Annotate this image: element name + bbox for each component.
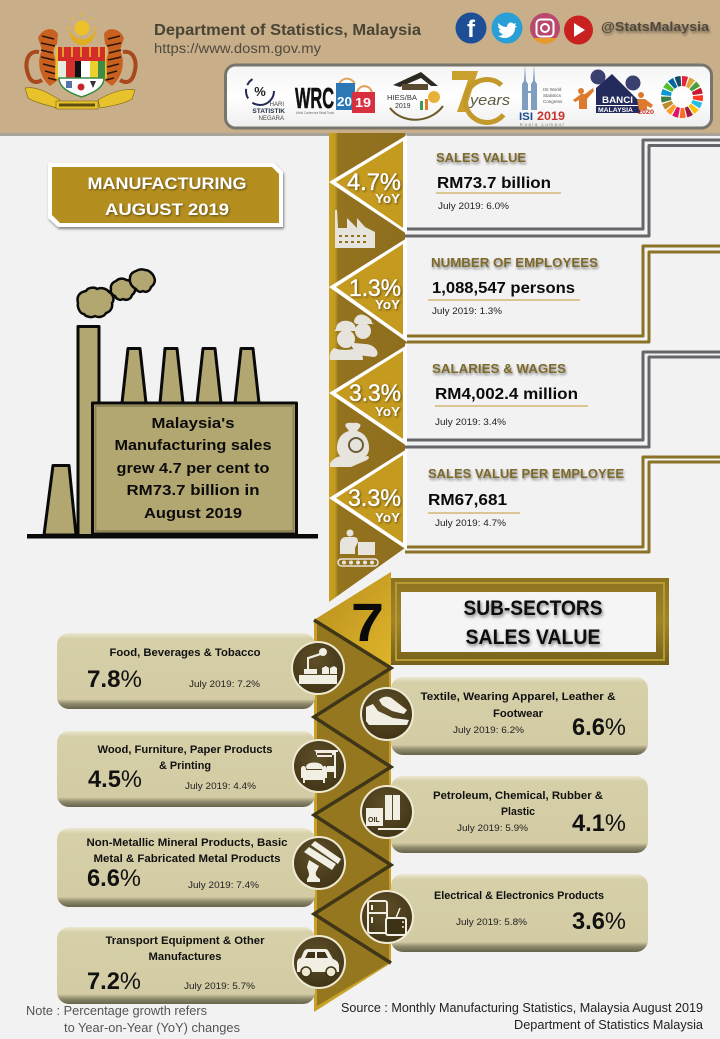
text: note: Note : Percentage growth refers (26, 1004, 207, 1018)
label: YoY: YoY (375, 404, 400, 419)
logo: ISI 2019 (519, 65, 565, 127)
logo: ISI 2019: Statistics (543, 93, 562, 98)
title badge: MANUFACTURING (88, 174, 246, 193)
stat: sales value: RM73.7 billion (437, 175, 551, 192)
logo: 70 years: years (469, 92, 511, 109)
card: textile: Textile, Wearing Apparel, Leather & (420, 691, 616, 703)
label: YoY: YoY (375, 297, 400, 312)
logo: ISI 2019: Congress (543, 99, 563, 104)
card: petroleum: 4.1% (572, 810, 626, 837)
icon: workers (330, 314, 378, 360)
logo: ISI 2019: Kuala Lumpur (520, 122, 564, 127)
logo: WRC 2019: World Conference Retail Trade (296, 111, 334, 115)
logo: HIES/BA 2019: HIES/BA (387, 95, 417, 102)
card: textile: July 2019: 6.2% (453, 725, 524, 735)
text: note (26, 1004, 240, 1035)
smoke clouds (77, 269, 155, 317)
icon: oil drums: OIL (368, 817, 380, 824)
stat: salaries and wages: July 2019: 3.4% (435, 417, 506, 427)
icon: coat of arms (25, 12, 136, 109)
stat: salaries and wages (432, 361, 588, 427)
text: factory summary: RM73.7 billion in (126, 482, 260, 499)
triangle: sales per employee (329, 449, 407, 550)
text: factory summary (114, 415, 272, 522)
logo: Banci Malaysia 2020: 2020 (638, 110, 655, 116)
card: wood furniture (57, 731, 315, 807)
card: food beverages tobacco: 7.8% (87, 666, 142, 693)
card: transport equipment: Manufactures (148, 951, 222, 963)
card: food beverages tobacco: Food, Beverages & Tobacco (110, 647, 261, 659)
icon: food machinery (291, 641, 345, 695)
card: electrical electronics (391, 874, 648, 952)
value: 4.7 percent: 4.7% (347, 169, 401, 196)
panel: sub-sectors heading: SUB-SECTORS (464, 597, 602, 620)
card: non-metallic mineral: 6.6% (87, 865, 141, 892)
triangle with number 7 (314, 572, 391, 668)
logo: WRC 2019: WRC (295, 83, 334, 115)
logo: Hari Statistik Negara: STATISTIK (252, 108, 285, 115)
value: 3.3 percent: 3.3% (348, 485, 401, 512)
stat: sales value: SALES VALUE (436, 150, 526, 165)
title badge: AUGUST 2019 (105, 200, 229, 219)
panel: partner logos (226, 65, 712, 131)
card: electrical electronics: July 2019: 5.8% (456, 917, 527, 927)
illustration: factory (27, 269, 318, 538)
logo: Hari Statistik Negara: NEGARA (259, 116, 284, 122)
icon: furniture (292, 739, 346, 793)
text: social handle: @StatsMalaysia (601, 19, 710, 34)
spine: lower zigzag ribbon (314, 572, 391, 1012)
card: textile (391, 677, 648, 755)
logo: Hari Statistik Negara (246, 77, 285, 122)
heading: department name: Department of Statistics, Malaysia (154, 22, 421, 39)
card: petroleum (391, 776, 648, 853)
card: textile: Footwear (493, 708, 544, 720)
panel lines: salaries (405, 352, 720, 447)
card: transport equipment: July 2019: 5.7% (184, 981, 255, 991)
stat: number of employees: 1,088,547 persons (432, 280, 575, 297)
text: factory summary: August 2019 (144, 505, 242, 522)
logo: ISI 2019: ISI World (543, 87, 562, 92)
logo: ISI 2019: ISI (519, 111, 533, 123)
panel lines: employees (405, 246, 720, 342)
icon: car (292, 935, 346, 989)
logo: sustainable development goals wheel (666, 81, 698, 113)
label: YoY: YoY (375, 510, 400, 525)
logo: Banci Malaysia 2020 (573, 70, 655, 116)
panel: sub-sectors heading (391, 578, 669, 665)
text: website: https://www.dosm.gov.my (154, 41, 321, 56)
logo: HIES/BA 2019: 2019 (395, 103, 411, 110)
card: electrical electronics: Electrical & Electronics Products (434, 890, 604, 902)
triangle: employees (329, 238, 407, 342)
card: petroleum: July 2019: 5.9% (457, 823, 528, 833)
logo: WRC 2019: 19 (355, 95, 371, 110)
card: food beverages tobacco: July 2019: 7.2% (189, 679, 260, 689)
text: factory summary: Manufacturing sales (114, 437, 272, 454)
stat: sales value per employee: July 2019: 4.7% (435, 518, 506, 528)
icon: oil drums (360, 785, 414, 839)
panel: sub-sectors heading: SALES VALUE (466, 626, 600, 649)
spine: upper ribbon (329, 133, 407, 602)
card: transport equipment (57, 927, 315, 1004)
text: factory summary: Malaysia's (152, 415, 234, 432)
card: transport equipment: Transport Equipment & Other (106, 935, 265, 947)
card: non-metallic mineral: Metal & Fabricated Metal Products (94, 853, 280, 865)
card: transport equipment: 7.2% (87, 968, 141, 995)
logo: 70 years (452, 71, 517, 131)
stat: salaries and wages: SALARIES & WAGES (432, 361, 566, 376)
card: non-metallic mineral: Non-Metallic Mineral Products, Basic (86, 837, 288, 849)
title badge (48, 163, 283, 227)
logo: Hari Statistik Negara: HARI (270, 102, 284, 108)
card: wood furniture: & Printing (159, 760, 211, 772)
card: food beverages tobacco (57, 633, 315, 709)
icon: instagram (530, 13, 560, 44)
card: textile: 6.6% (572, 714, 626, 741)
text: source (341, 1001, 703, 1032)
stat: number of employees: July 2019: 1.3% (432, 306, 502, 316)
text: factory summary: grew 4.7 per cent to (116, 460, 270, 477)
card: wood furniture: Wood, Furniture, Paper Products (98, 744, 272, 756)
card: petroleum: Plastic (501, 806, 535, 818)
icon: money bag in hand (330, 423, 369, 467)
logo: Banci Malaysia 2020: BANCI (602, 95, 633, 106)
stat: sales value: July 2019: 6.0% (438, 201, 509, 211)
card: wood furniture: July 2019: 4.4% (185, 781, 256, 791)
stat: sales value per employee: SALES VALUE PER EMPLOYEE (428, 466, 624, 481)
logo: WRC 2019: 20 (337, 94, 352, 109)
stat: number of employees (428, 255, 598, 316)
card: electrical electronics: 3.6% (572, 908, 626, 935)
icon: sneaker (360, 687, 414, 741)
text: source: Source : Monthly Manufacturing Statistics, Malaysia August 2019 (341, 1001, 703, 1015)
icon: facebook (456, 12, 486, 44)
icon: worker with box (338, 530, 378, 566)
panel lines: sales per employee (405, 457, 720, 552)
icon: factory (335, 210, 375, 248)
card: wood furniture: 4.5% (88, 766, 142, 793)
value: 1.3 percent: 1.3% (349, 275, 401, 302)
label: YoY: YoY (375, 191, 400, 206)
card: non-metallic mineral: July 2019: 7.4% (188, 880, 259, 890)
logo: HIES/BA 2019 (387, 72, 443, 120)
stat: sales value per employee: RM67,681 (428, 492, 507, 509)
triangle: sales value (329, 135, 407, 234)
logo: Banci Malaysia 2020: MALAYSIA (598, 108, 634, 114)
stat: sales value (436, 150, 561, 211)
text: note: to Year-on-Year (YoY) changes (64, 1021, 240, 1035)
number 7: 7 (351, 593, 384, 653)
text: source: Department of Statistics Malaysia (514, 1018, 703, 1032)
icon: facebook: f (467, 16, 476, 43)
logo: ISI 2019: 2019 (537, 111, 565, 123)
card: non-metallic mineral (57, 828, 315, 907)
stat: salaries and wages: RM4,002.4 million (435, 386, 578, 403)
header band (0, 0, 720, 136)
stat: sales value per employee (428, 466, 624, 528)
panel lines: sales value (405, 140, 720, 236)
icon: metal beams (292, 836, 346, 890)
value: 3.3 percent: 3.3% (349, 380, 401, 407)
triangle: salaries (329, 345, 407, 446)
stat: number of employees: NUMBER OF EMPLOYEES (431, 255, 598, 270)
logo: Hari Statistik Negara: % (254, 84, 266, 99)
icon: fridge and television (360, 890, 414, 944)
icon: youtube (564, 16, 593, 44)
icon: twitter (492, 12, 522, 44)
card: petroleum: Petroleum, Chemical, Rubber & (433, 790, 603, 802)
